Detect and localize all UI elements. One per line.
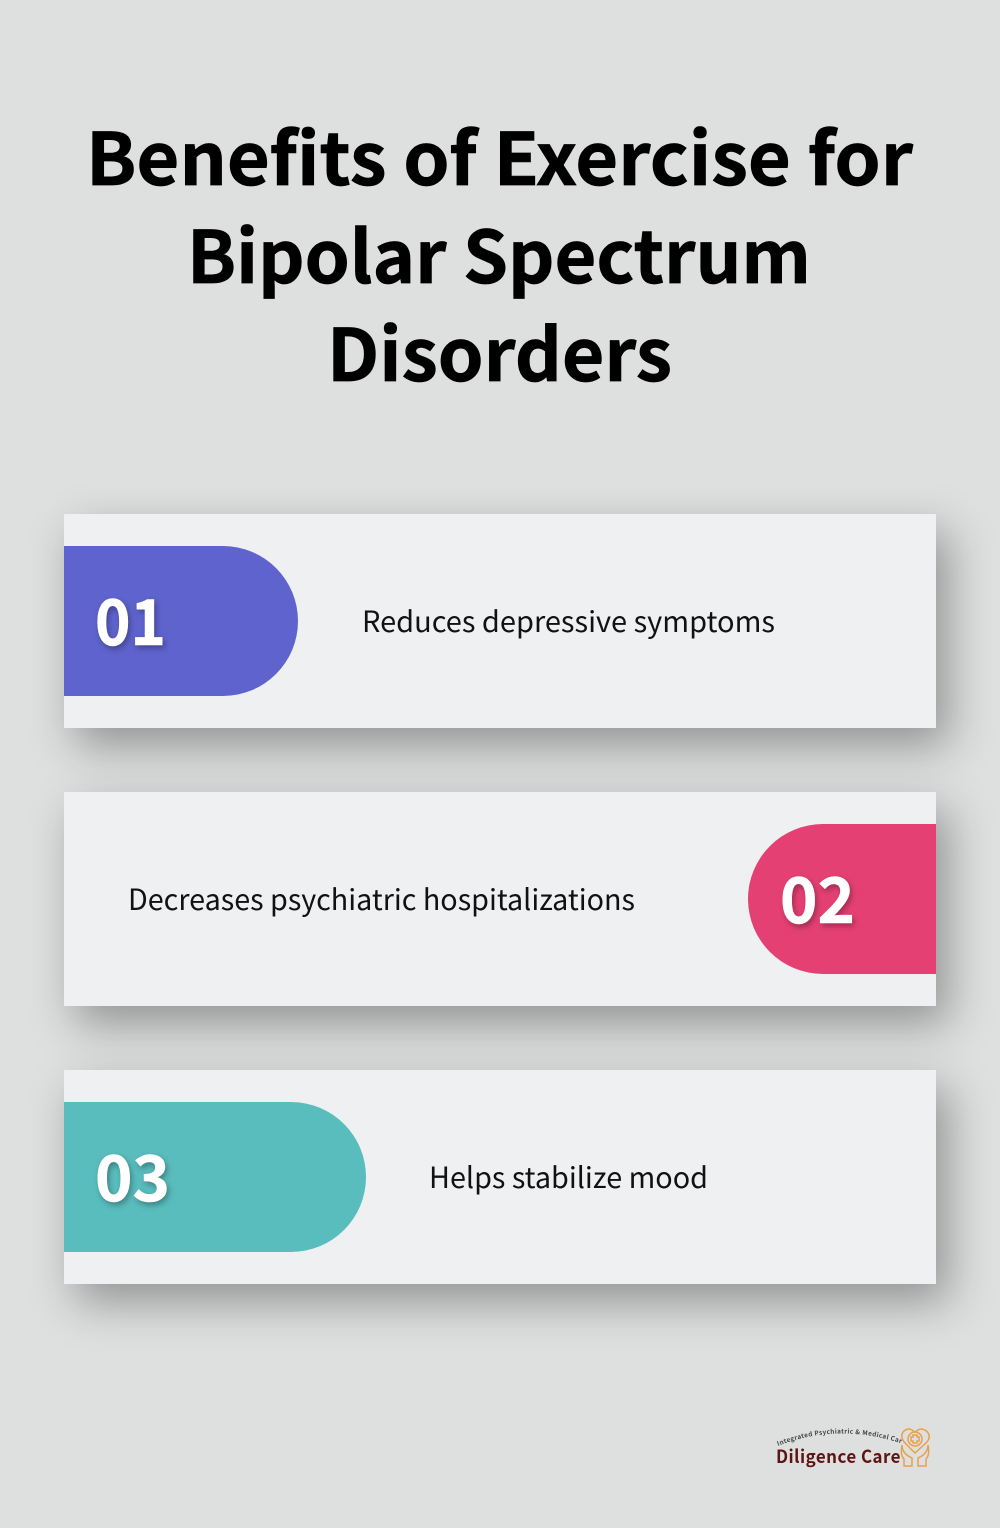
- logo icon: heart and hands: [901, 1429, 929, 1466]
- panel: benefit 03: [64, 1070, 936, 1284]
- title: Disorders: [327, 297, 672, 402]
- logo: Diligence Care: [776, 1428, 930, 1469]
- badge: 01: [64, 546, 298, 696]
- text: decreases psychiatric hospitalizations: Decreases psychiatric hospitalizations: [128, 877, 635, 919]
- badge: 03: 03: [95, 1129, 170, 1220]
- text: helps stabilize mood: Helps stabilize mood: [429, 1155, 708, 1197]
- logo wordmark: Diligence Care: [776, 1443, 901, 1469]
- title: Benefits of Exercise for: [86, 101, 914, 206]
- badge: 01: 01: [95, 573, 166, 664]
- logo tagline: Integrated Psychiatric & Medical Care: [776, 1428, 902, 1446]
- panel: benefit 01: [64, 514, 936, 728]
- title: Bipolar Spectrum: [187, 199, 811, 304]
- badge: 03: [64, 1102, 366, 1252]
- badge: 02: [748, 824, 936, 974]
- badge: 02: 02: [780, 851, 855, 942]
- panel: benefit 02: [64, 792, 936, 1006]
- title: [86, 101, 914, 402]
- text: reduces depressive symptoms: Reduces depressive symptoms: [362, 599, 775, 641]
